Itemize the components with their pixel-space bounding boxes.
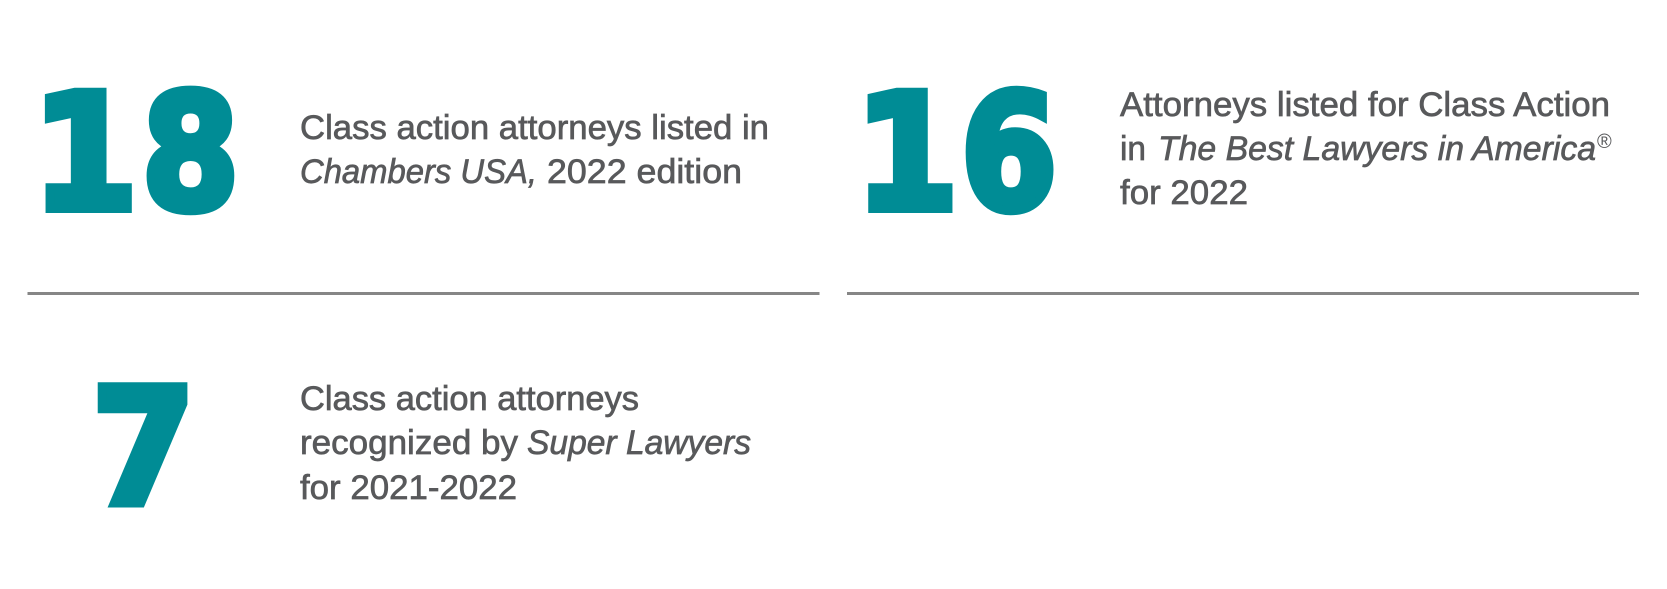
description: Super Lawyers: for 2021-2022 (300, 469, 517, 507)
stat panel: 16 Best Lawyers (855, 60, 1612, 246)
big number 18: 8 (142, 60, 239, 246)
description: Chambers USA: Chambers USA, (300, 153, 537, 191)
description: The Best Lawyers: Attorneys listed for Class Action (1120, 86, 1610, 124)
description: Super Lawyers: Super Lawyers (527, 424, 751, 462)
description: Chambers USA: 2022 edition (547, 153, 742, 191)
description: Chambers USA: Class action attorneys listed in (300, 109, 769, 147)
stat panel: 18 Chambers USA (32, 60, 769, 246)
big number 18: 1 (32, 60, 138, 246)
description: Super Lawyers: recognized by (300, 424, 518, 462)
description: Super Lawyers: Class action attorneys (300, 380, 639, 418)
description: The Best Lawyers: for 2022 (1120, 174, 1248, 212)
big number 7: 7 (92, 355, 195, 541)
divider right (847, 292, 1639, 295)
description: The Best Lawyers: in (1120, 130, 1146, 168)
description: The Best Lawyers: ® (1597, 131, 1612, 153)
description: The Best Lawyers: The Best Lawyers in America (1158, 130, 1596, 168)
divider left (28, 292, 820, 295)
big number 16: 6 (961, 60, 1057, 246)
stat panel: 7 Super Lawyers (92, 355, 751, 541)
big number 16: 1 (855, 60, 958, 246)
